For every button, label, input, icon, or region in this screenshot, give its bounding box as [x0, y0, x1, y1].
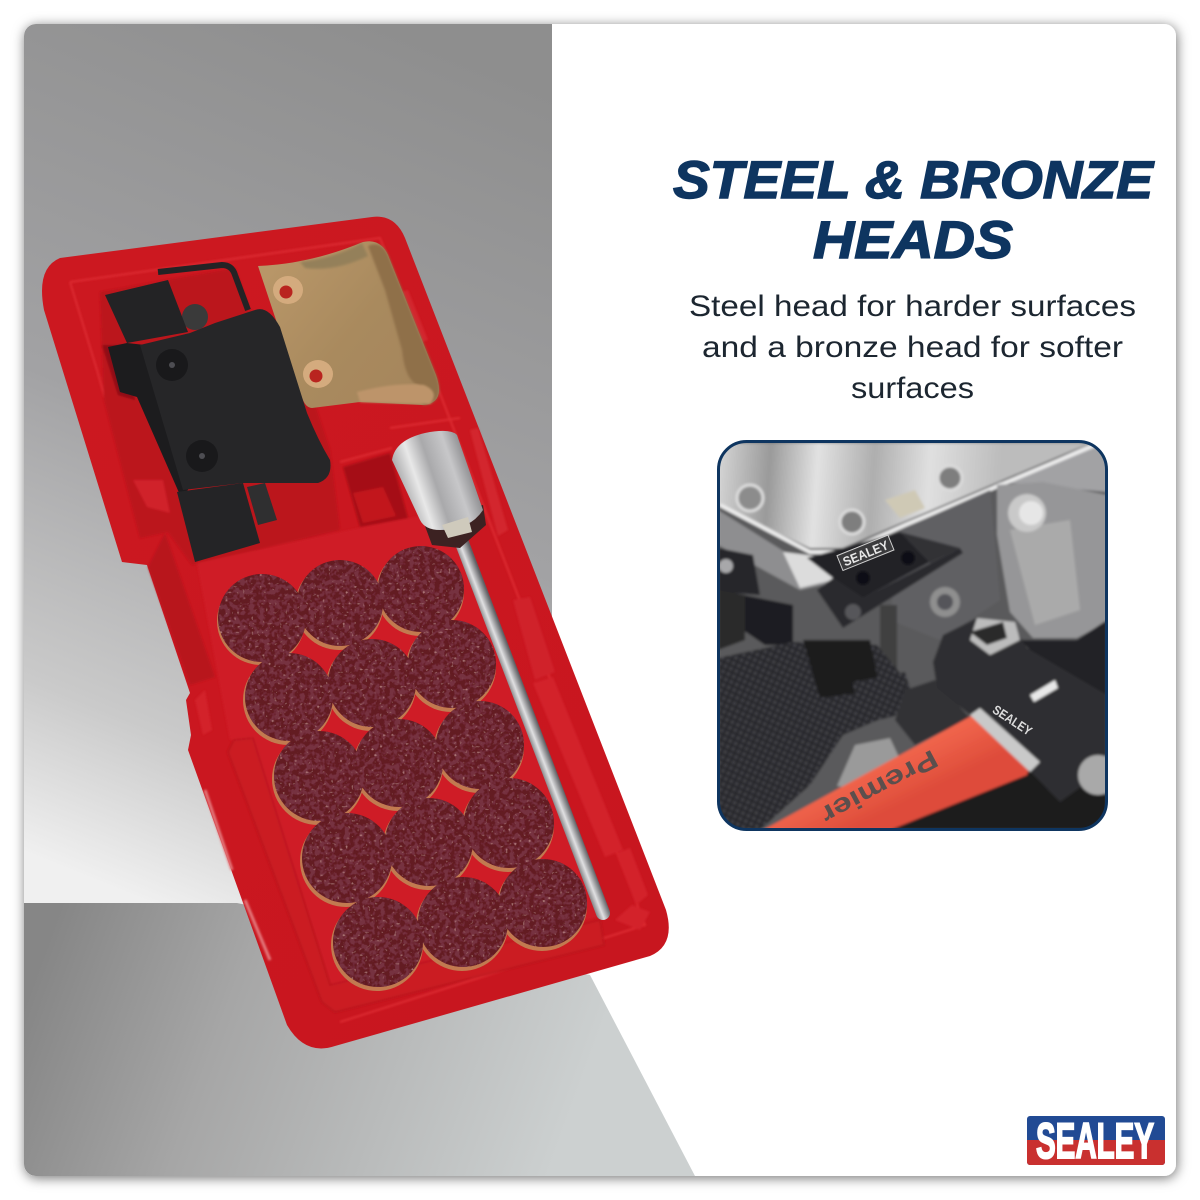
photo: tool in use on engine [718, 441, 1118, 830]
heading: STEEL & BRONZE [673, 151, 1155, 210]
flange left [718, 510, 835, 590]
tool recess [100, 268, 340, 565]
description text [689, 290, 1136, 405]
Premier lettering: Premier [816, 744, 943, 830]
side pads [398, 290, 428, 344]
icon: allen key [158, 265, 248, 310]
description text: surfaces [851, 372, 974, 405]
red handle [763, 715, 1030, 830]
red plastic tray body [42, 217, 669, 1048]
icon: bronze head plate [258, 241, 439, 408]
abrasive discs [217, 546, 587, 991]
notch block [148, 533, 215, 685]
tray with abrasive discs and tools [42, 217, 669, 1048]
black tool in place [817, 548, 963, 628]
description text: and a bronze head for softer [702, 331, 1123, 364]
dark area below handle [892, 771, 1105, 828]
icon: black steel head tool [105, 280, 330, 562]
connector left [743, 595, 793, 645]
SEALEY mark on tool: SEALEY [841, 537, 891, 569]
engine casting bracket [897, 489, 992, 636]
knurled rod [880, 605, 897, 670]
description text: Steel head for harder surfaces [689, 290, 1136, 323]
heading [673, 151, 1155, 270]
tray interior moulding [70, 238, 650, 1022]
panel: grey studio backdrop [24, 24, 695, 1176]
socket recess [343, 453, 408, 527]
heading: HEADS [813, 211, 1013, 270]
right dark hoses [1022, 620, 1105, 695]
raised L-shaped pad [228, 738, 604, 1012]
disc recess [197, 515, 606, 987]
rim highlights [205, 790, 270, 960]
icon: rod and chrome holder [392, 431, 603, 913]
gloved hand [718, 642, 910, 830]
silver sump pan [718, 443, 1090, 548]
ratchet head [933, 618, 1107, 802]
SEALEY mark on handle: SEALEY [990, 702, 1035, 739]
